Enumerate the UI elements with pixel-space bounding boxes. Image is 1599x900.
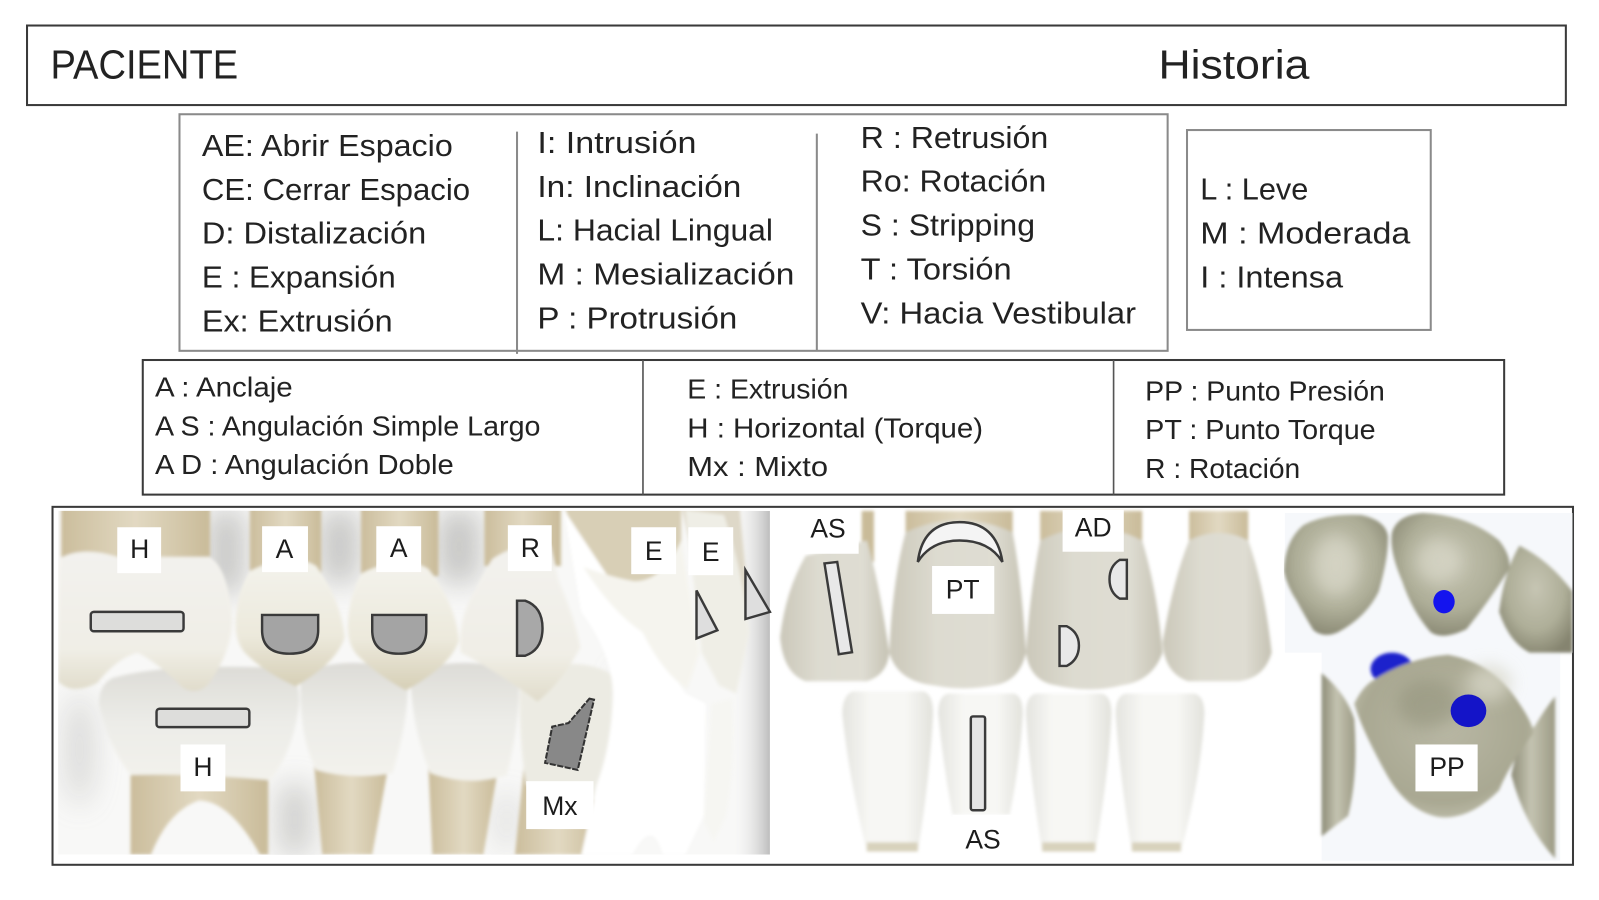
label: H lower	[180, 744, 225, 791]
legend column 2: L: Hacial Lingual	[537, 214, 773, 248]
label: E: E	[702, 537, 720, 567]
blue pressure point: upper tooth	[1433, 590, 1455, 613]
legend column 1: AE: Abrir Espacio	[202, 129, 453, 163]
label: PP	[1415, 744, 1478, 791]
attachment column 3: PT : Punto Torque	[1145, 414, 1376, 445]
attachment: anclaje 1	[262, 615, 318, 654]
lower occlusal teeth	[1322, 673, 1355, 836]
legend column 1: E : Expansión	[202, 261, 396, 295]
legend column 3: R : Retrusión	[861, 121, 1048, 155]
label: AS upper	[796, 510, 859, 554]
label: AS lower	[952, 815, 1014, 856]
legend column 3: V: Hacia Vestibular	[861, 296, 1136, 330]
attachment column 2: Mx : Mixto	[687, 451, 828, 482]
white incisors	[564, 510, 706, 855]
illustration: posterior teeth lateral view	[58, 505, 770, 855]
label: PT: PT	[946, 575, 980, 605]
legend column 1: Ex: Extrusión	[202, 304, 393, 338]
label: R: R	[521, 533, 540, 563]
legend column 3: S : Stripping	[861, 209, 1035, 243]
attachment: horizontal upper	[91, 612, 184, 631]
legend column 2: P : Protrusión	[537, 301, 737, 335]
attachment: anclaje 2	[372, 615, 426, 654]
panel: severity legend	[1187, 130, 1431, 330]
attachment column 3	[1145, 375, 1385, 484]
label: R	[508, 525, 552, 571]
upper occlusal teeth	[1284, 515, 1388, 635]
anterior roots	[862, 511, 874, 562]
label: E	[688, 527, 733, 575]
header: paciente and historia	[27, 26, 1566, 105]
legend column 3: T : Torsión	[861, 252, 1012, 286]
attachment: AD lower	[1060, 626, 1079, 666]
panel: severity legend: M : Moderada	[1200, 217, 1410, 251]
attachment: horizontal lower	[157, 709, 249, 727]
label: E	[631, 527, 676, 574]
lower anterior teeth	[842, 691, 933, 852]
label: A: A	[276, 534, 294, 564]
label: PP: PP	[1429, 752, 1465, 782]
attachment column 2: E : Extrusión	[687, 374, 848, 405]
label: H lower: H	[193, 752, 213, 782]
label: AS lower: AS	[965, 824, 1001, 854]
blue pressure point: back	[1371, 653, 1413, 685]
legend column 2	[537, 126, 794, 335]
illustration: palatal view with pressure points	[1284, 513, 1572, 861]
attachment column 1	[155, 372, 540, 480]
attachment: PT crescent	[918, 522, 1002, 562]
legend column 3	[861, 121, 1136, 330]
legend column 3: Ro: Rotación	[861, 165, 1046, 199]
upper anterior crowns	[780, 541, 889, 681]
blue pressure point: lower tooth	[1451, 694, 1486, 727]
label: AS upper: AS	[810, 513, 846, 543]
illustration: anterior teeth frontal view	[780, 510, 1272, 856]
attachment: rotation	[517, 601, 543, 656]
label: AD: AD	[1075, 512, 1112, 542]
label: H	[117, 527, 161, 573]
attachment column 1: A D : Angulación Doble	[155, 449, 454, 480]
panel: attachment legend	[143, 360, 1504, 495]
legend column 2: M : Mesialización	[537, 258, 794, 292]
attachment column 1: A S : Angulación Simple Largo	[155, 410, 540, 441]
legend column 1: CE: Cerrar Espacio	[202, 173, 470, 207]
label: H: H	[130, 534, 149, 564]
label: E: E	[645, 536, 663, 566]
label: A: A	[390, 533, 408, 563]
label: PT	[932, 566, 994, 614]
label: Mx	[526, 781, 594, 829]
attachment: extrusion 1	[697, 590, 717, 638]
attachment column 1: A : Anclaje	[155, 372, 293, 403]
attachment column 3: PP : Punto Presión	[1145, 375, 1385, 406]
attachment column 3: R : Rotación	[1145, 453, 1300, 484]
legend column 1	[202, 129, 470, 338]
lower crowns	[99, 667, 299, 780]
attachment: mixto	[545, 699, 594, 770]
attachment: AS lower	[971, 716, 985, 810]
panel: movement legend	[179, 114, 1168, 354]
label: A	[262, 526, 308, 572]
heading: historia: Historia	[1158, 42, 1310, 88]
attachment column 2: H : Horizontal (Torque)	[687, 413, 983, 444]
upper roots	[59, 510, 212, 559]
label: AD	[1063, 510, 1124, 552]
legend column 1: D: Distalización	[202, 217, 426, 251]
panel: severity legend: L : Leve	[1200, 172, 1308, 206]
label: Mx: Mx	[542, 791, 578, 821]
legend column 2: I: Intrusión	[537, 126, 697, 160]
panel: severity legend: I : Intensa	[1200, 261, 1343, 295]
attachment column 2	[687, 374, 983, 482]
attachment: AD upper	[1110, 560, 1127, 599]
label: A	[376, 526, 421, 572]
lower roots	[131, 770, 268, 855]
upper crowns	[58, 552, 233, 691]
panel: teeth illustrations	[53, 505, 1573, 865]
legend column 2: In: Inclinación	[537, 170, 741, 204]
heading: paciente: PACIENTE	[50, 42, 238, 88]
soft highlights	[1313, 535, 1511, 728]
attachment: extrusion 2	[745, 570, 770, 619]
attachment: AS upper	[824, 562, 852, 654]
